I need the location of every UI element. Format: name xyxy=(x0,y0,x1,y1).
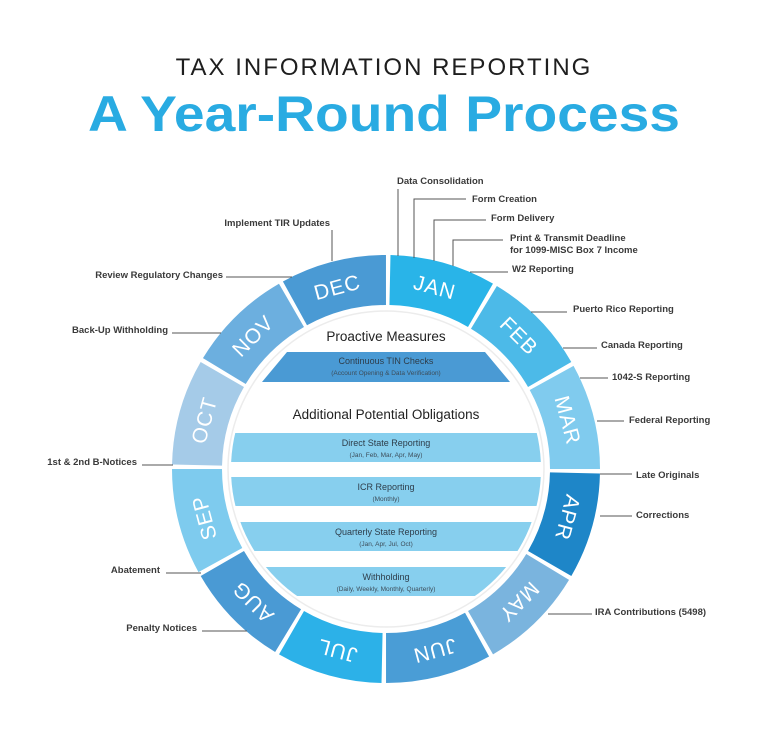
band: Direct State Reporting: Direct State Reporting xyxy=(342,438,430,448)
segment: OCT xyxy=(193,276,579,662)
callouts: left xyxy=(47,218,332,634)
segment: APR xyxy=(193,276,579,662)
callout: Penalty Notices xyxy=(126,623,247,634)
callout: Print & Transmit Deadline: for 1099-MISC Box 7 Income xyxy=(510,245,638,256)
callout: Form Delivery xyxy=(434,213,555,261)
callout: Form Delivery: Form Delivery xyxy=(491,213,555,224)
callout: Data Consolidation xyxy=(397,176,484,256)
callout: Data Consolidation: Data Consolidation xyxy=(397,176,484,187)
segment: FEB xyxy=(126,209,646,729)
callouts: right xyxy=(397,176,710,618)
month names: JAN xyxy=(411,271,458,305)
callout: Print & Transmit Deadline xyxy=(453,233,638,266)
callout: Print & Transmit Deadline: Print & Transmit Deadline xyxy=(510,233,626,244)
callout: Puerto Rico Reporting: Puerto Rico Reporting xyxy=(573,304,674,315)
callout: Penalty Notices: Penalty Notices xyxy=(126,623,197,634)
title xyxy=(88,54,680,142)
segment: SEP xyxy=(129,212,643,726)
band: Withholding: Withholding xyxy=(362,572,410,582)
month names: FEB xyxy=(495,313,542,360)
bands: obligations xyxy=(220,433,552,596)
month names: AUG xyxy=(228,576,279,627)
segment: NOV xyxy=(126,209,646,729)
band: Continuous TIN Checks: Continuous TIN Checks xyxy=(339,356,434,366)
month names: SEP xyxy=(188,493,222,542)
band: Withholding: (Daily, Weekly, Monthly, Quarterly) xyxy=(337,586,435,593)
callout: Form Creation: Form Creation xyxy=(472,194,537,205)
band: ICR Reporting: ICR Reporting xyxy=(357,482,415,492)
month names: MAR xyxy=(550,394,585,447)
month ring xyxy=(126,209,646,729)
callout: Late Originals: Late Originals xyxy=(636,470,699,481)
callout: 1042-S Reporting: 1042-S Reporting xyxy=(612,372,690,383)
callout: 1st & 2nd B-Notices: 1st & 2nd B-Notices xyxy=(47,457,137,468)
callout: Back-Up Withholding: Back-Up Withholding xyxy=(72,325,168,336)
callout: Canada Reporting xyxy=(563,340,683,351)
month names: JUN xyxy=(410,633,459,667)
segment: AUG xyxy=(126,209,646,729)
month names: JUL xyxy=(315,634,360,666)
callout: W2 Reporting: W2 Reporting xyxy=(512,264,574,275)
segment: DEC xyxy=(129,212,643,726)
callout: Late Originals xyxy=(600,470,699,481)
callout: Review Regulatory Changes: Review Regulatory Changes xyxy=(95,270,223,281)
callout: IRA Contributions (5498): IRA Contributions (5498) xyxy=(595,607,706,618)
band: Direct State Reporting: (Jan, Feb, Mar, Apr, May) xyxy=(350,452,422,459)
band: Direct State Reporting xyxy=(342,438,430,459)
callout: Federal Reporting: Federal Reporting xyxy=(629,415,710,426)
month names xyxy=(188,271,585,667)
callout: Abatement xyxy=(111,565,201,576)
month names: NOV xyxy=(228,311,279,362)
band: Continuous TIN Checks: (Account Opening & Data Verification) xyxy=(331,370,441,377)
segment: MAR xyxy=(129,212,643,726)
title: A Year-Round Process xyxy=(88,86,680,142)
callout: Canada Reporting: Canada Reporting xyxy=(601,340,683,351)
callout: Implement TIR Updates xyxy=(224,218,332,261)
month names: MAY xyxy=(494,577,543,626)
callout: Abatement: Abatement xyxy=(111,565,161,576)
band: Quarterly State Reporting: Quarterly State Reporting xyxy=(335,527,437,537)
band: ICR Reporting xyxy=(357,482,415,503)
segment: JUL xyxy=(193,276,579,662)
heading: Proactive Measures: Proactive Measures xyxy=(326,329,446,344)
month names: OCT xyxy=(188,395,222,446)
segment: JAN xyxy=(193,276,579,662)
callout: Implement TIR Updates: Implement TIR Updates xyxy=(224,218,330,229)
callout: Form Creation xyxy=(414,194,537,258)
month names: DEC xyxy=(312,271,363,305)
band: Quarterly State Reporting xyxy=(335,527,437,548)
callout: Corrections xyxy=(600,510,689,521)
month names: APR xyxy=(550,492,584,543)
band: ICR Reporting: (Monthly) xyxy=(372,496,400,503)
band: Withholding xyxy=(337,572,435,593)
band: Continuous TIN Checks xyxy=(262,352,510,382)
band: Quarterly State Reporting: (Jan, Apr, Jul, Oct) xyxy=(359,541,413,548)
callout: Corrections: Corrections xyxy=(636,510,689,521)
segment: MAY xyxy=(126,209,646,729)
title: TAX INFORMATION REPORTING xyxy=(176,54,592,81)
heading: Additional Potential Obligations: Additional Potential Obligations xyxy=(293,407,480,422)
callout: W2 Reporting xyxy=(470,264,574,275)
segment: JUN xyxy=(129,212,643,726)
